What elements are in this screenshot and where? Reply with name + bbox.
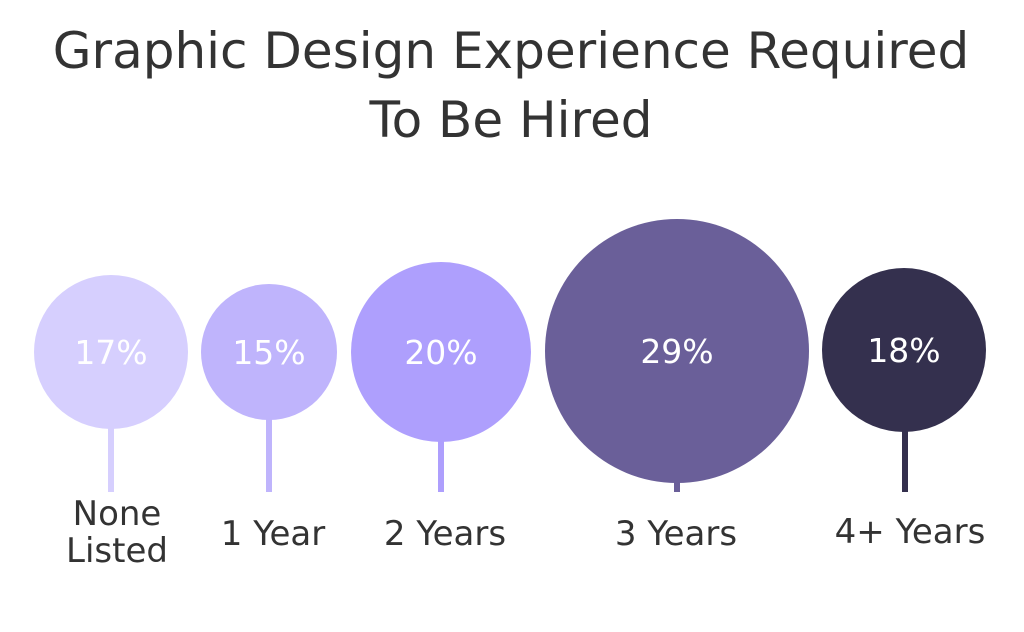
bubble: 4+ years — [822, 268, 986, 552]
bubble: none listed — [34, 275, 188, 571]
bubble: 3 years — [545, 219, 809, 554]
bubble: 2 years: 2 Years — [384, 514, 506, 554]
bubble: 1 year — [201, 284, 337, 554]
title — [53, 22, 969, 149]
bubble: none listed: Listed — [66, 531, 168, 571]
title: Graphic Design Experience Required — [53, 22, 969, 80]
bubble: 2 years — [351, 262, 531, 554]
bubble: none listed: None — [73, 494, 161, 534]
bubble: 4+ years: 18% — [867, 331, 941, 370]
bubble: none listed: 17% — [74, 333, 148, 372]
bubble: 4+ years: 4+ Years — [835, 512, 985, 552]
bubble: 2 years: 20% — [404, 333, 478, 372]
title: To Be Hired — [369, 91, 652, 149]
bubble: 3 years: 29% — [640, 332, 714, 371]
bubble: 1 year: 15% — [232, 333, 306, 372]
bubble: 1 year: 1 Year — [221, 514, 325, 554]
bubble: 3 years: 3 Years — [615, 514, 737, 554]
